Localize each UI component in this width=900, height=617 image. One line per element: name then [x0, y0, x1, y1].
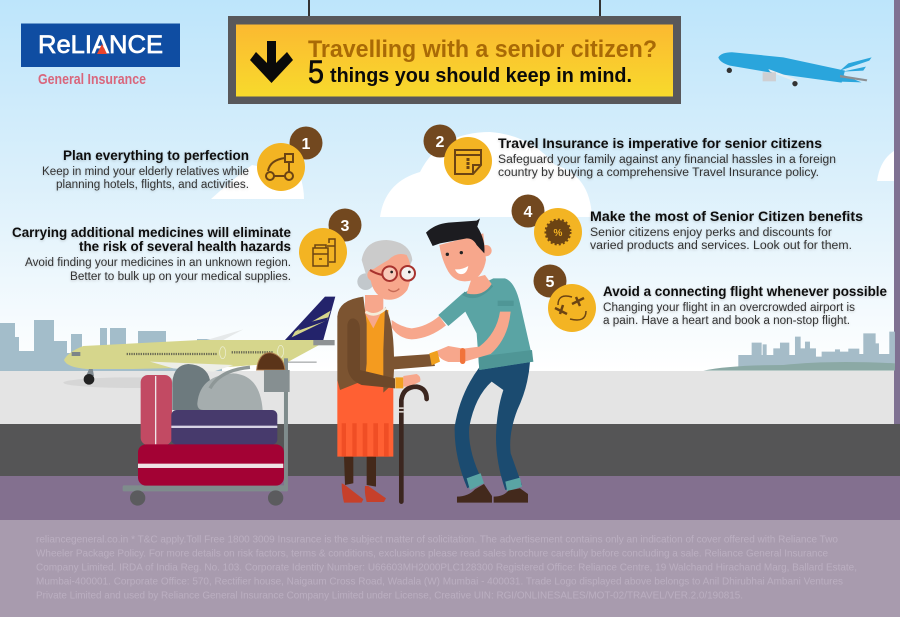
man's arm and hand: [437, 312, 511, 362]
text: country by buying a comprehensive Travel Insurance policy.: [498, 167, 819, 179]
title: things you should keep in mind.: [330, 64, 632, 87]
number badge: [534, 264, 566, 298]
skirt: [337, 380, 393, 457]
arm: [347, 318, 395, 388]
item 1: [42, 126, 322, 191]
number badge: [328, 208, 362, 242]
clouds: [211, 132, 894, 217]
text: Travel Insurance is imperative for senior citizens: [498, 136, 822, 151]
left airplane: [63, 297, 335, 388]
text: a pain. Have a heart and book a non-stop flight.: [603, 315, 850, 327]
disclaimer text: Wheeler Package Policy. For more details on risk factors, terms & conditions, exclusions please read sales brochure carefully before concluding a sale. Reliance General Insurance: [36, 548, 828, 560]
title: Travelling with a senior citizen?: [308, 36, 657, 63]
text: [42, 148, 249, 191]
title: [308, 36, 657, 90]
legs: [344, 456, 376, 487]
senior woman and young man: [337, 218, 533, 503]
text: Changing your flight in an overcrowded airport is: [603, 302, 855, 314]
icon: down arrow: [250, 41, 293, 83]
brown handbag: [257, 353, 285, 370]
logo blue panel: [21, 24, 180, 67]
icon: discount seal: %: [554, 228, 563, 239]
purple suitcase: [171, 410, 277, 445]
text: Better to bulk up on your medical supplies.: [70, 271, 291, 283]
cane: [401, 387, 427, 502]
trolley frame: [123, 358, 288, 506]
light grey duffel bag: [197, 373, 263, 410]
text: Plan everything to perfection: [63, 148, 249, 163]
skyline left: [0, 320, 222, 371]
man's hair: [426, 218, 485, 253]
text: [12, 225, 291, 283]
disclaimer text: reliancegeneral.co.in * T&C apply.Toll Free 1800 3009 Insurance is the subject matter of solicitation. The advertisement contains only an indication of cover offered with Reliance Two: [36, 534, 838, 546]
text: Avoid finding your medicines in an unknown region.: [25, 257, 291, 269]
icon: discount seal: [534, 208, 582, 256]
icon: medicine bottles: [299, 228, 347, 276]
man's shoes: [457, 484, 528, 503]
glasses: [370, 266, 415, 281]
pink suitcase: [141, 375, 172, 445]
number badge: 3: [341, 218, 350, 235]
number badge: 4: [524, 204, 533, 221]
disclaimer text: Company Limited. IRDA of India Reg. No. 103. Corporate Identity Number: U66603MH2000PLC128300 Registered Office: Reliance Centre, 19 Walchand Hirachand Marg, Ballard Estate,: [36, 562, 857, 574]
text: Keep in mind your elderly relatives while: [42, 166, 249, 178]
text: Make the most of Senior Citizen benefits: [590, 209, 863, 224]
text: planning hotels, flights, and activities.: [56, 179, 249, 191]
logo subtitle: General Insurance: [38, 71, 146, 88]
number badge: [290, 126, 322, 160]
tarmac ground: [0, 371, 900, 520]
text: [498, 136, 836, 179]
hair and bun: [357, 240, 412, 290]
jacket: [337, 297, 367, 390]
text: Senior citizens enjoy perks and discounts for: [590, 227, 832, 239]
necklace and neck: [365, 295, 383, 328]
text: varied products and services. Look out for them.: [590, 240, 852, 252]
footer panel: [0, 520, 900, 617]
face: [370, 254, 411, 300]
man's back arm: [392, 316, 446, 339]
number badge: 5: [546, 274, 555, 291]
disclaimer text: Private Limited and used by Reliance General Insurance Company Limited under License, Creative UIN: RGI/ONLINESALES/MOT-02/TRAVEL/VER.2.0/190815.: [36, 590, 743, 602]
text: [590, 209, 863, 252]
item 2: [424, 124, 836, 185]
logo wordmark: ReLIANCE: [38, 31, 163, 59]
item 5: [534, 264, 887, 332]
icon: route: [257, 143, 305, 191]
text: Safeguard your family against any financial hassles in a foreign: [498, 154, 836, 166]
icon: connecting flights: [548, 284, 596, 332]
logo: [21, 24, 180, 88]
man's legs: [455, 362, 530, 490]
number badge: 2: [436, 134, 445, 151]
blouse: [360, 310, 388, 380]
logo red triangle: [97, 44, 107, 54]
right edge strip: [894, 0, 900, 476]
text: Carrying additional medicines will eliminate: [12, 225, 291, 240]
man's shirt: [438, 278, 533, 370]
text: Avoid a connecting flight whenever possible: [603, 284, 887, 299]
sky background: [0, 0, 900, 371]
shoes: [342, 483, 386, 503]
man's neck and head: [467, 275, 492, 294]
title: 5: [308, 54, 324, 90]
item 4: [512, 194, 863, 256]
icon: policy document: [444, 137, 492, 185]
disclaimer text: Mumbai-400001. Corporate Office: 570, Rectifier house, Naigaum Cross Road, Wadala (W) Mumbai - 400031. Trade Logo displayed above belongs to Anil Dhirubhai Ambani Ventures: [36, 576, 843, 588]
luggage trolley: [123, 353, 290, 506]
text: the risk of several health hazards: [79, 239, 291, 254]
number badge: [424, 124, 456, 158]
disclaimer text: [36, 534, 857, 602]
red suitcase: [138, 444, 284, 486]
number badge: [512, 194, 544, 228]
man: [392, 218, 533, 503]
woman: [337, 240, 440, 503]
skyline right: [703, 332, 895, 371]
text: [603, 284, 887, 327]
top right airplane: [718, 52, 872, 86]
number badge: 1: [302, 136, 311, 153]
hanging sign: [228, 0, 681, 104]
grey bag: [172, 364, 213, 410]
item 3: [12, 208, 362, 283]
